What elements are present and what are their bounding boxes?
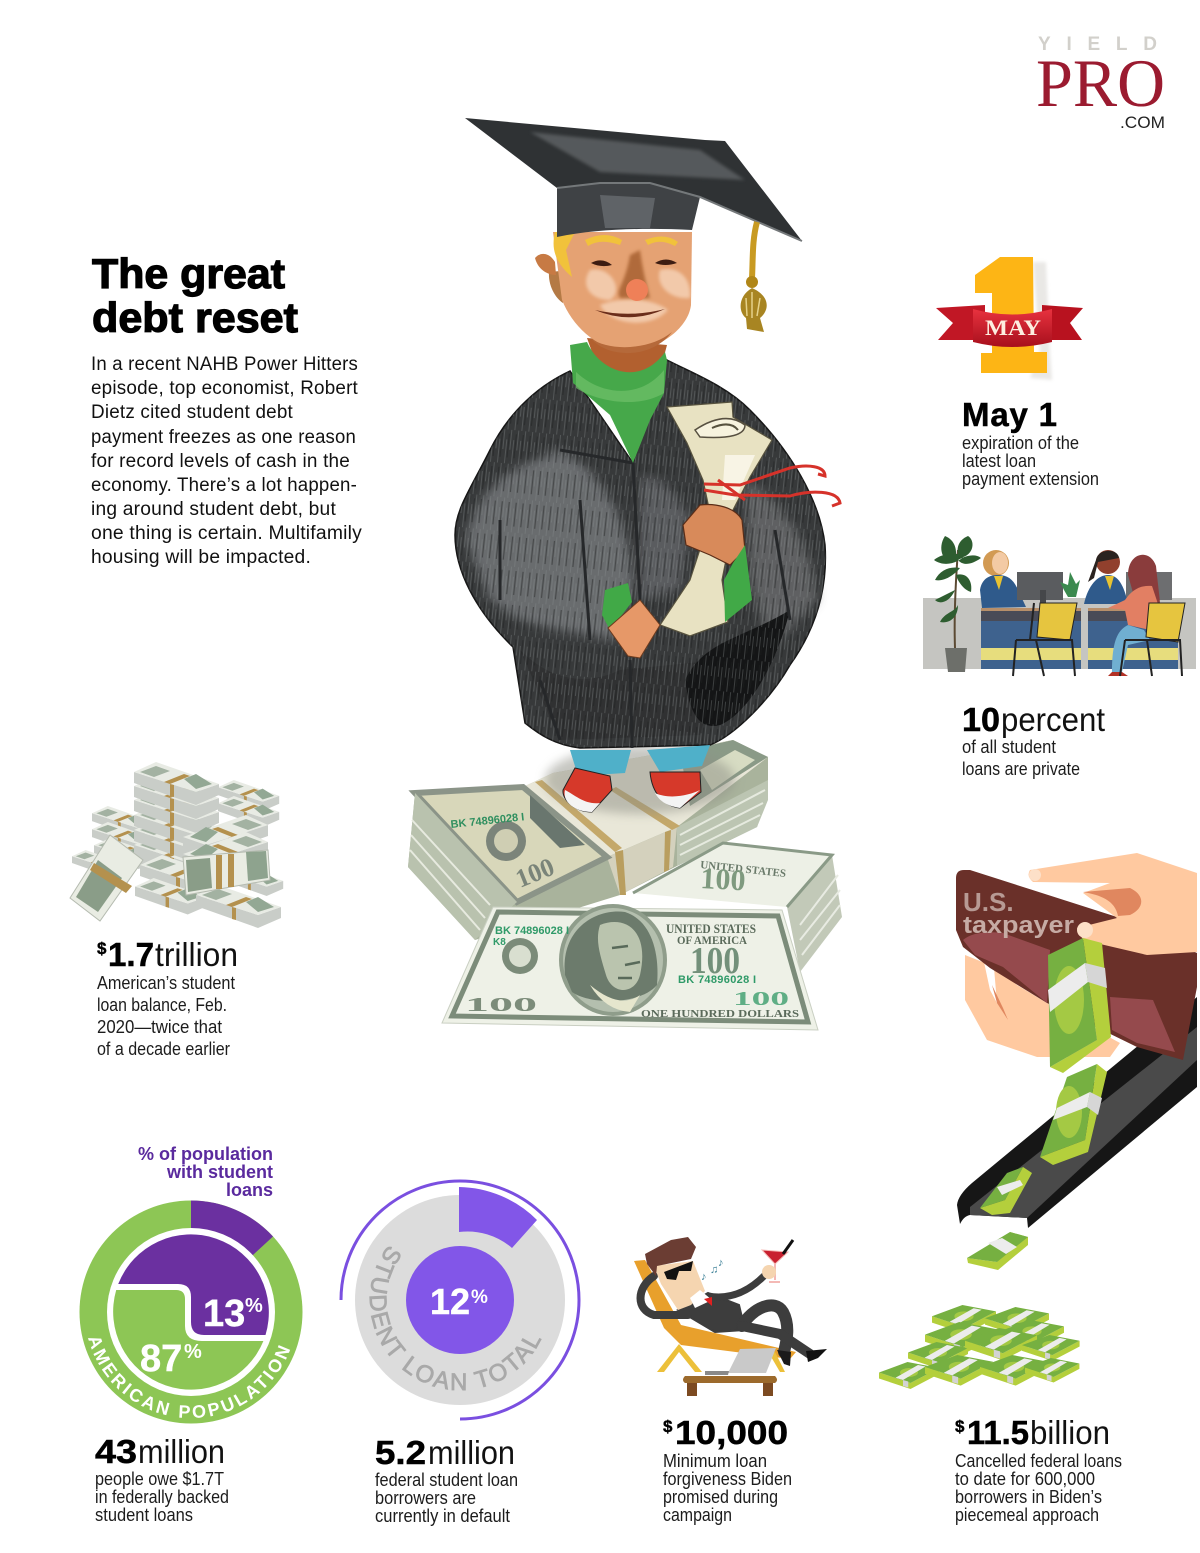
table [683,1376,777,1396]
mortarboard cap [465,118,802,241]
intro text block: for record levels of cash in the [91,451,350,472]
illustration: graduate [455,118,840,812]
stat: 5.2 million [375,1434,518,1526]
title: debt reset [92,294,298,341]
neck [587,338,667,378]
stat: 11.5 billion: billion [1030,1414,1110,1451]
chart: student loan total donut [340,1180,580,1420]
stat: 10,000: promised during [663,1487,778,1507]
intro text block: one thing is certain. Multifamily [91,523,362,544]
stat: 5.2 million: 5.2 [375,1434,426,1471]
banker two [1084,550,1128,604]
intro text block: housing will be impacted. [91,547,311,568]
chart: student loan total donut: 12 [430,1281,470,1322]
music notes: ♫ [710,1264,718,1276]
stat: 11.5 billion: $ [955,1417,965,1436]
label: percent of population [138,1144,273,1200]
head [645,1237,712,1310]
stat: 1.7 trillion: $ [97,939,107,958]
intro text block: Dietz cited student debt [91,402,294,423]
icon: May 1 calendar badge: MAY [985,315,1041,340]
stat: May 1: payment extension [962,469,1099,489]
left sleeve cuff [602,583,632,630]
intro text block: ing around student debt, but [91,499,337,520]
back stack of bills: BK 74896028 I [450,811,525,831]
tassel [741,222,767,332]
stat: 10 percent: 10 [962,701,1000,738]
stat: 11.5 billion: Cancelled federal loans [955,1451,1122,1471]
stat: May 1: latest loan [962,451,1036,471]
lower hand [608,600,660,658]
falling cash bundles [967,938,1111,1270]
stat: 1.7 trillion: loan balance, Feb. [97,995,227,1015]
stat: 11.5 billion: 11.5 [967,1414,1029,1451]
front hundred dollar bill: 100 [733,988,789,1010]
label: percent of population: loans [226,1180,273,1200]
illustration: stacks of hundred dollar bills [408,740,842,1030]
stat: 1.7 trillion [97,936,238,1059]
plant [934,536,981,672]
stat: 11.5 billion [955,1414,1122,1525]
logo: YIELD [1038,34,1157,55]
middle stack of bills: 100 [700,862,746,897]
lower hand [965,955,1120,1057]
left foot [563,750,631,812]
icon: May 1 calendar badge [936,257,1083,380]
logo: PRO [1036,45,1165,121]
music notes: ♪ [718,1257,724,1269]
stat: 10,000: campaign [663,1505,732,1525]
stat: May 1: May 1 [962,396,1057,433]
stat: 1.7 trillion: American’s student [97,973,235,993]
illustration: relaxing businessman [634,1237,827,1396]
stat: 11.5 billion: piecemeal approach [955,1505,1099,1525]
red ribbon [704,466,840,506]
stat: 10 percent: loans are private [962,759,1080,779]
pile of green cash [879,1305,1080,1389]
music notes [701,1257,724,1283]
intro text block: economy. There’s a lot happen- [91,475,357,496]
chart: American population donut: % [184,1341,202,1363]
chart: American population donut: AMERICAN POPULATION [88,1338,290,1418]
chart: student loan total donut: % [471,1287,488,1308]
stat: 10,000: forgiveness Biden [663,1469,792,1489]
stat: 10,000: 10,000 [675,1414,788,1451]
chart: student loan total donut: STUDENT LOAN TOTAL [369,1246,542,1390]
green turtleneck [570,342,667,463]
chart: American population donut: 13 [203,1293,245,1335]
back stack of bills [408,740,768,940]
computer monitors [1017,572,1172,608]
intro text block: payment freezes as one reason [91,427,356,448]
lounge chair [634,1260,796,1372]
front hundred dollar bill: ONE HUNDRED DOLLARS [641,1009,799,1020]
illustration: pile of cash [70,762,283,928]
illustration: wallet, hands and money chute [879,853,1197,1389]
intro text block: episode, top economist, Robert [91,378,359,399]
stat: 10,000: Minimum loan [663,1451,767,1471]
diploma [660,402,772,636]
gown [455,360,825,748]
small desk plant [1060,572,1080,597]
front hundred dollar bill [442,904,818,1030]
stat: 5.2 million: federal student loan [375,1470,518,1490]
upper hand [1029,853,1197,955]
banker one [980,550,1026,608]
stat: 10 percent: percent [1001,701,1105,738]
stat: 1.7 trillion: of a decade earlier [97,1039,230,1059]
label: percent of population: with student [166,1162,273,1182]
stat: 11.5 billion: to date for 600,000 [955,1469,1095,1489]
portrait [559,904,667,1016]
label: percent of population: % of population [138,1144,273,1164]
martini glass [762,1240,793,1282]
chart: American population donut [80,1200,302,1424]
stat: May 1: expiration of the [962,433,1079,453]
front hundred dollar bill: 100 [690,940,740,982]
money chute [957,997,1197,1228]
stat: 43 million: million [138,1433,225,1470]
stat: 10 percent: of all student [962,737,1056,757]
middle stack of bills: UNITED STATES [700,859,787,880]
front hundred dollar bill: BK 74896028 I [678,974,756,986]
middle stack of bills [633,843,842,972]
right foot [647,745,710,808]
front hundred dollar bill: OF AMERICA [677,933,747,947]
front hundred dollar bill: UNITED STATES [666,921,756,936]
stat: 43 million: student loans [95,1505,193,1525]
suit and limbs [640,1276,827,1366]
yellow chairs [1013,603,1185,676]
stat: 10,000: $ [663,1417,673,1436]
right sleeve cuff [724,545,752,622]
stat: 1.7 trillion: 2020—twice that [97,1017,222,1037]
wallet: U.S. [963,887,1014,917]
music notes: ♪ [701,1271,706,1283]
stat: 1.7 trillion: 1.7 [108,936,154,973]
illustration: bank loan desk [923,536,1196,676]
stat: 43 million: people owe $1.7T [95,1469,224,1489]
wallet [956,870,1197,1060]
back stack of bills: 100 [511,852,558,894]
stat: May 1 [962,396,1099,489]
chart: American population donut: % [245,1295,263,1317]
head [535,232,692,353]
stat: 43 million: in federally backed [95,1487,229,1507]
chart: American population donut: 87 [140,1338,182,1380]
intro text block [91,354,362,568]
holding hand [683,505,745,565]
stat: 10 percent [962,701,1105,779]
stat: 5.2 million: borrowers are [375,1488,476,1508]
stat: 43 million [95,1433,229,1525]
stat: 5.2 million: currently in default [375,1506,510,1526]
stat: 10,000 [663,1414,792,1525]
soft shadow of the graduate [545,746,735,814]
laptop [705,1348,776,1375]
intro text block: In a recent NAHB Power Hitters [91,354,358,375]
title [92,250,298,341]
logo: .COM [1120,113,1165,132]
front hundred dollar bill: BK 74896028 I [495,925,569,937]
stat: 43 million: 43 [95,1433,137,1470]
title: The great [92,250,285,297]
stat: 1.7 trillion: trillion [155,936,238,973]
front hundred dollar bill: 100 [465,994,537,1016]
stat: 5.2 million: million [428,1434,515,1471]
front hundred dollar bill: K8 [493,937,506,948]
stat: 11.5 billion: borrowers in Biden’s [955,1487,1102,1507]
customer [1108,555,1160,676]
wallet: taxpayer [963,912,1074,939]
